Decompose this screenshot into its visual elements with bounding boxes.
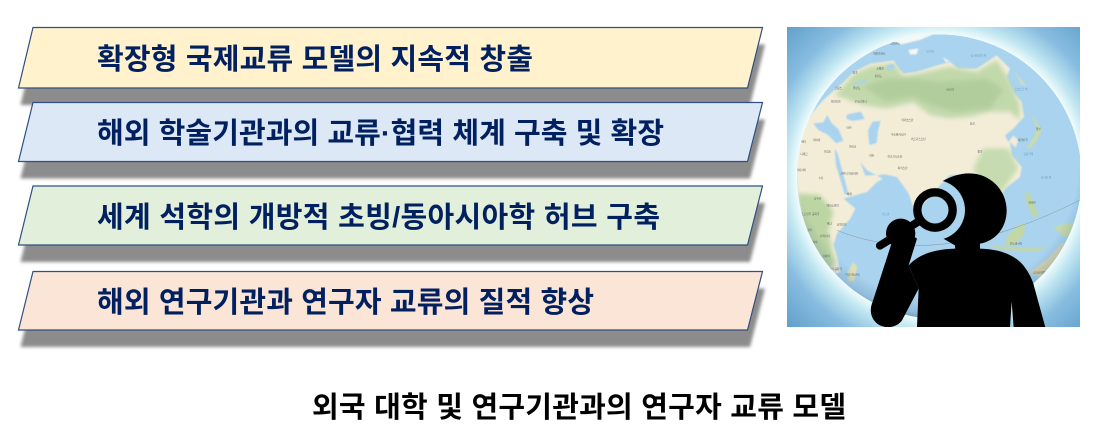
mainland Eurasia and Africa xyxy=(780,55,1024,278)
bar 1: expandable exchange model: 확장형 국제교류 모델의 지속적 창출 xyxy=(97,43,533,76)
bar 4: qualitative improvement: 해외 연구기관과 연구자 교류의 질적 향상 xyxy=(97,286,594,319)
map labels: 몽골 xyxy=(970,121,975,125)
globe edge shading xyxy=(798,188,1080,318)
map labels: 케냐 xyxy=(827,221,832,225)
map labels: 이집트 xyxy=(824,149,832,153)
bar 4: qualitative improvement xyxy=(18,272,765,347)
map labels: 예멘 xyxy=(847,192,852,196)
south China and Southeast Asia forest xyxy=(973,148,1018,197)
map labels: 나미비아 xyxy=(808,240,818,244)
map labels: 파키스탄 xyxy=(898,166,908,170)
Persian Gulf xyxy=(860,162,876,176)
map labels: 오스트레일리아 xyxy=(1033,270,1051,274)
central Africa forest xyxy=(798,193,835,273)
map labels: 에티오피아 xyxy=(827,203,839,207)
magnifier handle xyxy=(880,221,919,246)
bar 1: expandable exchange model xyxy=(18,28,765,105)
map labels: 폴란드 xyxy=(853,86,861,90)
icon: person silhouette with magnifier xyxy=(871,173,1045,327)
map labels: 키르기스스탄 xyxy=(911,137,926,141)
map labels: 러시아 xyxy=(946,87,954,91)
body xyxy=(909,249,1045,327)
Sakhalin and Kurils xyxy=(1013,70,1027,87)
bar 2: overseas academic institutions xyxy=(18,102,765,178)
map labels xyxy=(794,41,1052,277)
map labels: 인도네시아 xyxy=(1010,241,1023,245)
northern forest zone xyxy=(835,60,1020,120)
map labels: 아이슬란드 xyxy=(873,51,886,55)
map labels: 이라크 xyxy=(849,145,857,149)
icon: globe map xyxy=(780,33,1082,319)
map labels: 잠비아 xyxy=(822,254,830,258)
Black Sea xyxy=(846,112,865,121)
Baltic Sea xyxy=(853,79,867,86)
map labels: 알제리 xyxy=(799,139,807,143)
map labels: 리비아 xyxy=(813,138,821,142)
map labels: 앙골라 xyxy=(805,228,813,232)
map labels: 일본 xyxy=(1036,127,1041,131)
map labels: 수단 xyxy=(819,176,824,180)
map labels: 인도양 xyxy=(882,212,890,216)
Sumatra and Java xyxy=(987,244,1050,252)
map labels: 프랑스 xyxy=(835,86,843,90)
White Sea xyxy=(887,64,895,70)
map labels: 사우디 아라비아 xyxy=(840,171,859,175)
Caspian Sea xyxy=(868,121,881,145)
map labels: 니제르 xyxy=(800,152,808,156)
map labels: 나이지리아 xyxy=(794,168,807,172)
map labels: 마다가스카르 xyxy=(845,273,861,277)
map labels: 동시베리아 해 xyxy=(971,54,987,58)
map labels: 탄자니아 xyxy=(820,234,830,238)
image background glow xyxy=(787,27,1080,327)
map labels: 동중국해 xyxy=(1023,152,1034,156)
map labels: 북극해 xyxy=(926,49,934,53)
map labels: 대한민국 xyxy=(1018,138,1028,142)
map labels: 콩고 민주 공화국 xyxy=(801,212,820,216)
map labels: 영국 xyxy=(853,71,858,75)
islands xyxy=(813,33,1082,282)
hand xyxy=(886,218,916,244)
Madagascar xyxy=(847,262,857,282)
map labels: 터키 xyxy=(847,125,852,129)
map labels: 우크라이나 xyxy=(855,99,867,103)
Greenland and Svalbard xyxy=(893,34,933,45)
magnifier ring xyxy=(917,192,953,228)
head xyxy=(942,173,1007,250)
map labels: 오호츠크 해 xyxy=(1015,87,1028,91)
map labels: 소말리아 xyxy=(837,223,847,227)
caption: 외국 대학 및 연구기관과의 연구자 교류 모델 xyxy=(312,391,846,424)
map labels: 남수단 xyxy=(814,197,822,201)
map labels: 필리핀 xyxy=(1028,200,1036,204)
arm xyxy=(871,236,919,327)
New Guinea xyxy=(1053,222,1082,239)
bar 2: overseas academic institutions: 해외 학술기관과의 교류·협력 체계 구축 및 확장 xyxy=(97,117,664,150)
Borneo xyxy=(1005,224,1026,245)
Taiwan and Philippines xyxy=(1025,190,1038,218)
equator line xyxy=(837,200,1080,245)
map labels: 이란 xyxy=(869,154,875,158)
globe image with magnifier silhouette xyxy=(780,27,1082,327)
map labels: 필리핀 해 xyxy=(1041,175,1052,179)
Mediterranean xyxy=(813,115,843,143)
deep forest xyxy=(863,78,1003,112)
map labels: 핀란드 xyxy=(875,74,883,78)
Red Sea xyxy=(835,148,849,194)
bar 3: inviting world scholars: 세계 석학의 개방적 초빙/동아시아학 허브 구축 xyxy=(97,201,660,234)
map labels: 이탈리아 xyxy=(831,99,841,103)
map labels: 스웨덴 xyxy=(876,66,884,70)
map labels: 아프가니스탄 xyxy=(888,154,903,158)
map labels: 우즈베키스탄 xyxy=(891,133,906,137)
map labels: 카자흐스탄 xyxy=(901,118,914,122)
map labels: 그린란드 xyxy=(890,41,900,45)
map labels: 남아프리카 공화국 xyxy=(822,267,842,271)
Japan xyxy=(1026,110,1042,149)
Australia xyxy=(1030,242,1066,278)
map labels: 중국 xyxy=(978,149,983,153)
bar 3: inviting world scholars xyxy=(18,186,765,262)
